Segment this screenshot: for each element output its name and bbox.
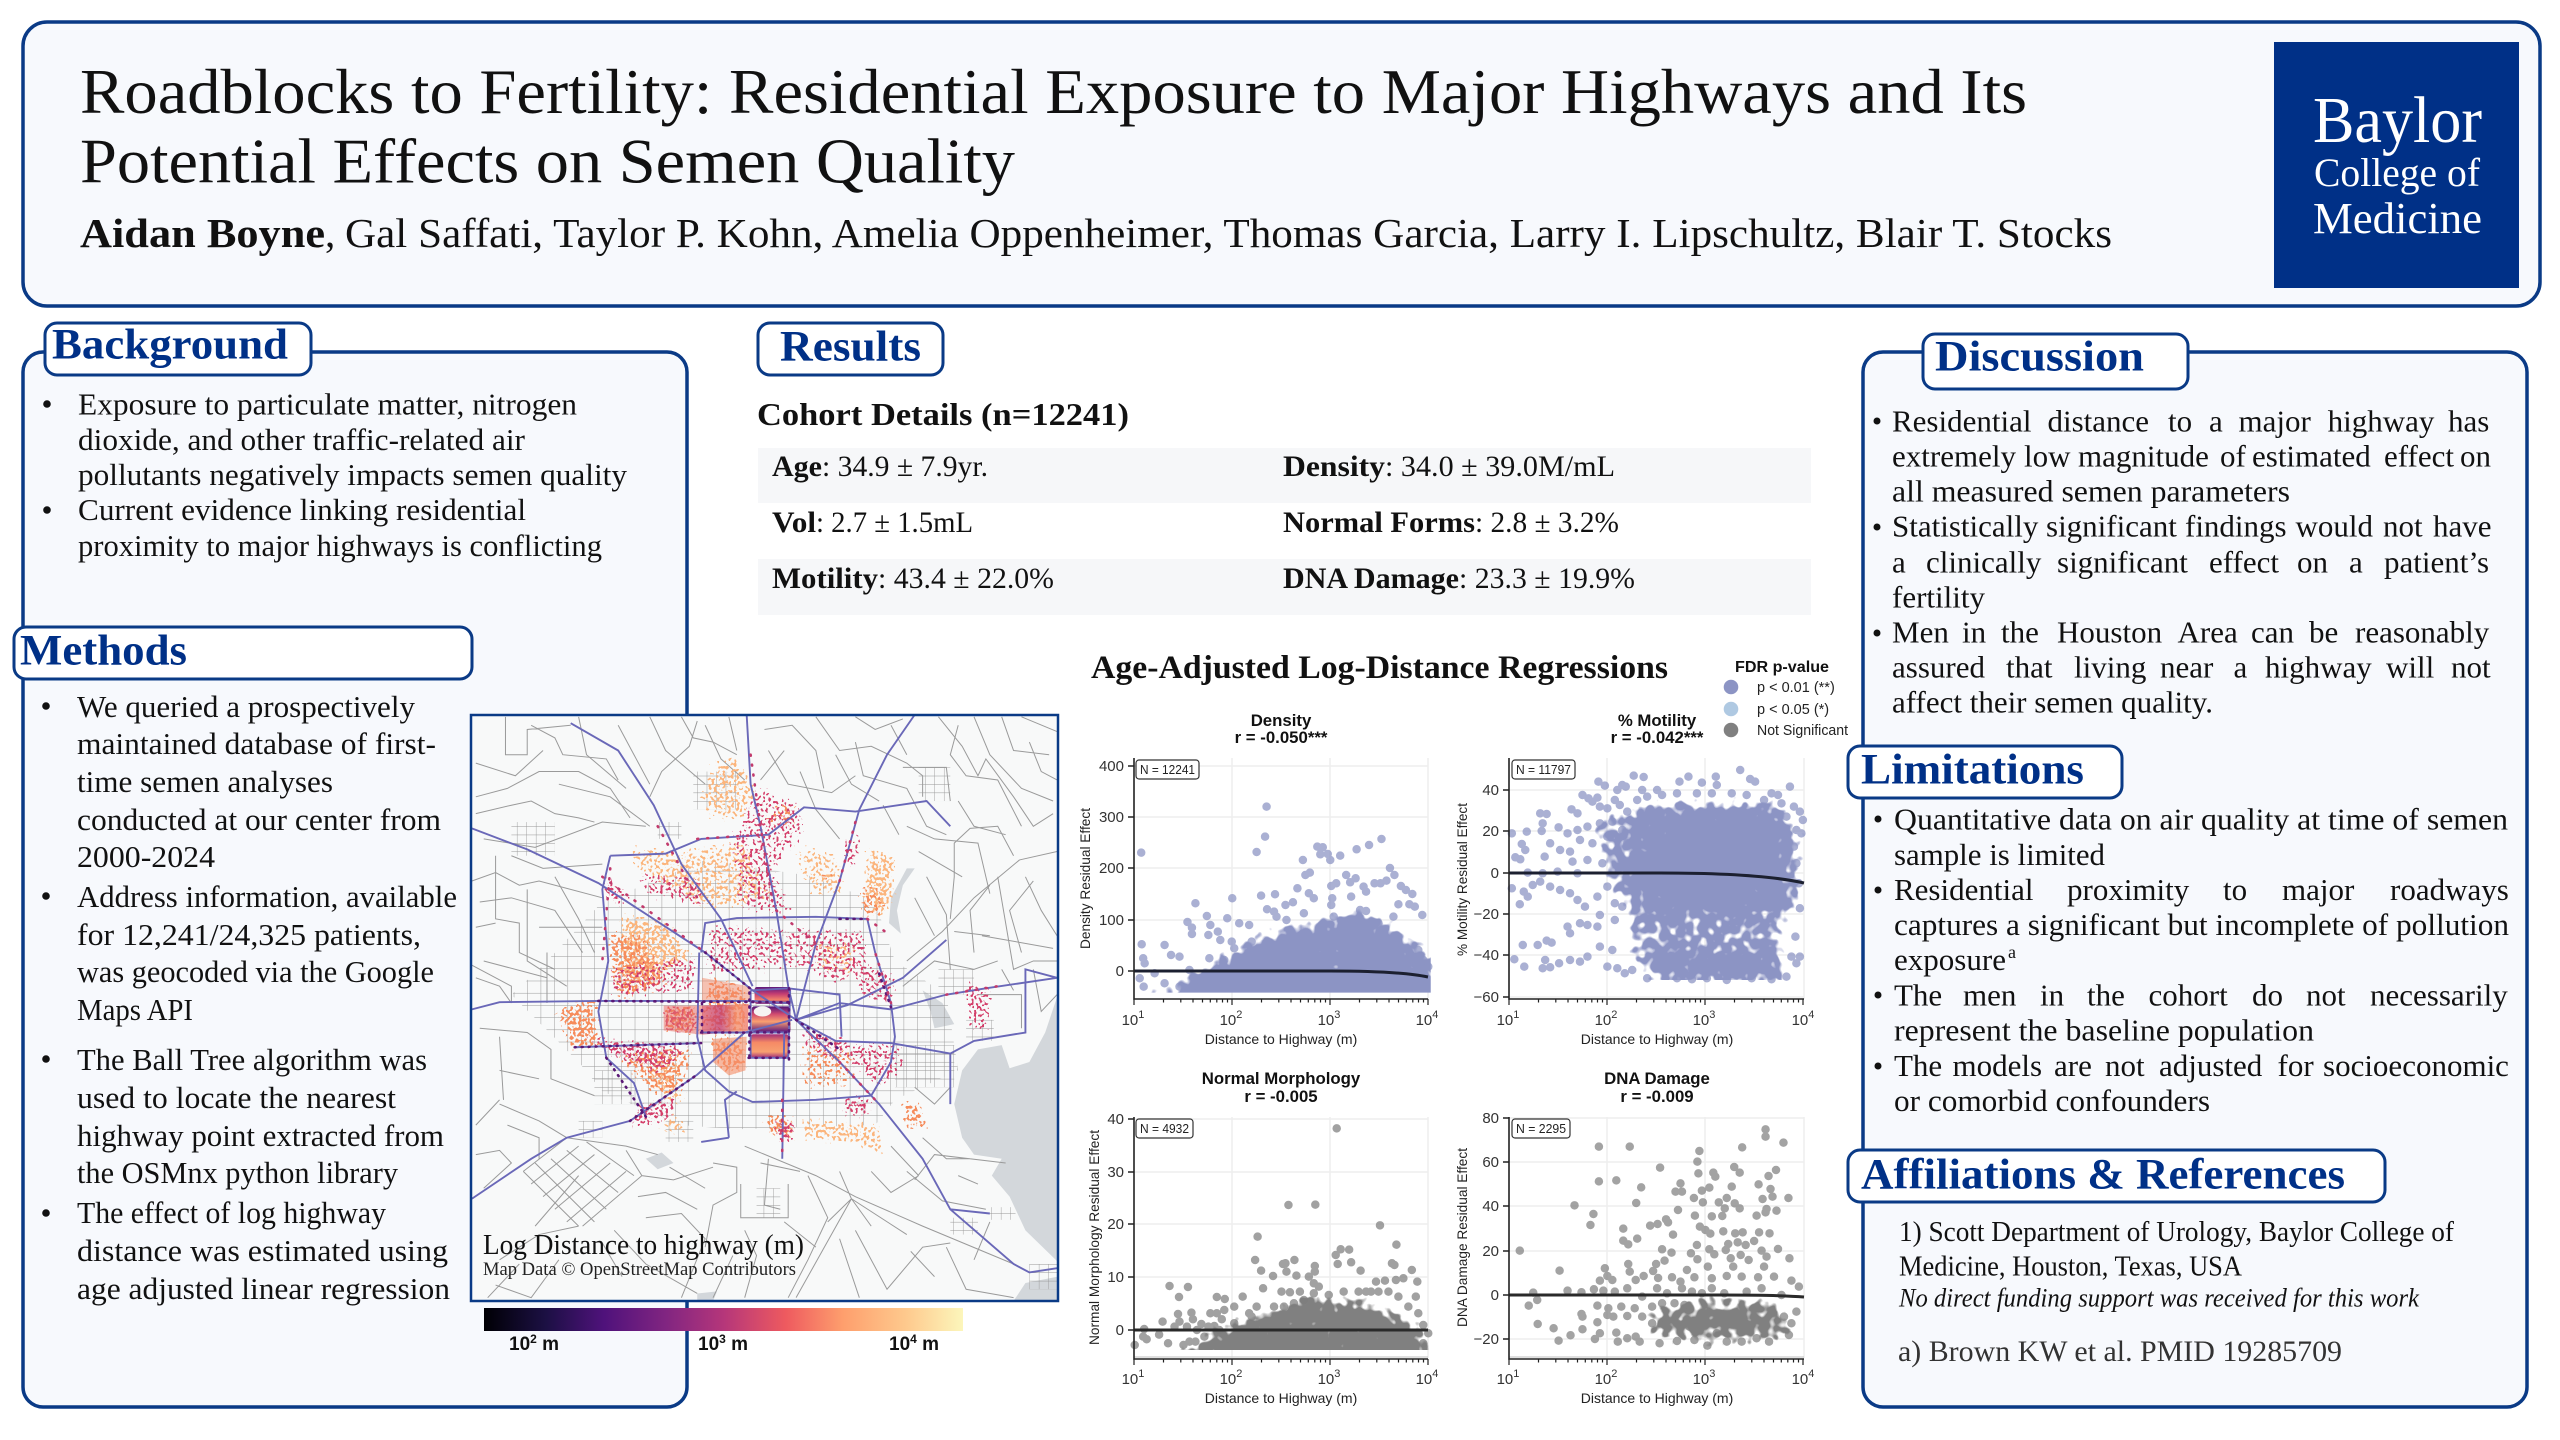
text block: discussion bullets: near bbox=[2160, 650, 2214, 684]
chart: motility scatter bbox=[1454, 711, 1814, 1047]
text block: methods bullets: was geocoded via the Google bbox=[77, 954, 434, 989]
colorbar legend: 10 bbox=[509, 1334, 530, 1355]
text block: limitations bullets: or comorbid confounders bbox=[1894, 1083, 2210, 1118]
text block: discussion bullets: a bbox=[2234, 650, 2248, 684]
table: cohort details: Age bbox=[772, 450, 822, 483]
water: Galveston Bay bbox=[646, 868, 1058, 1301]
map caption bbox=[483, 1230, 804, 1280]
text block: limitations bullets: the bbox=[2087, 978, 2125, 1012]
text block: limitations bullets: adjusted bbox=[2159, 1048, 2263, 1083]
heading: methods: Methods bbox=[20, 628, 187, 674]
chart: DNA damage scatter: DNA Damage bbox=[1604, 1069, 1710, 1088]
chart: motility scatter: 20 bbox=[1482, 823, 1499, 840]
chart: normal morphology scatter: 10 bbox=[1220, 1371, 1236, 1388]
chart: normal morphology scatter: 10 bbox=[1107, 1269, 1124, 1286]
text block: discussion bullets: have bbox=[2433, 508, 2492, 544]
colorbar legend: 10 bbox=[889, 1334, 910, 1355]
panel: right column (discussion, limitations, affiliations) bbox=[1848, 334, 2527, 1407]
text block: methods bullets: Address information, available bbox=[77, 879, 457, 914]
text block: methods bullets: the OSMnx python library bbox=[77, 1155, 398, 1190]
text block: limitations bullets: in bbox=[2040, 978, 2065, 1012]
text block: discussion bullets: that bbox=[2006, 650, 2053, 684]
text block: limitations bullets: to bbox=[2223, 872, 2247, 907]
text block: discussion bullets: effect bbox=[2384, 438, 2454, 474]
dark points along highways bbox=[575, 919, 891, 1121]
chart: density scatter: Density Residual Effect bbox=[1077, 808, 1093, 949]
colorbar legend: m bbox=[537, 1334, 559, 1355]
colorbar legend: 3 bbox=[719, 1332, 726, 1346]
text block: limitations bullets: proximity bbox=[2067, 872, 2190, 907]
text block: limitations bullets: roadways bbox=[2390, 872, 2509, 907]
chart: DNA damage scatter: 40 bbox=[1482, 1198, 1499, 1215]
chart: motility scatter: 3 bbox=[1709, 1009, 1715, 1021]
urban road grid bbox=[511, 860, 958, 1129]
chart: density scatter: Distance to Highway (m) bbox=[1205, 1031, 1357, 1047]
chart: DNA damage scatter: 2 bbox=[1611, 1368, 1617, 1380]
text block: limitations bullets: do bbox=[2252, 978, 2283, 1012]
map caption: Log Distance to highway (m) bbox=[483, 1230, 804, 1261]
text block: discussion bullets: low bbox=[2024, 438, 2071, 474]
chart: normal morphology scatter: 10 bbox=[1318, 1371, 1334, 1388]
chart: motility scatter: 10 bbox=[1792, 1012, 1808, 1029]
chart: density scatter: 4 bbox=[1432, 1009, 1438, 1021]
logo: Baylor College of Medicine: Baylor bbox=[2313, 84, 2482, 157]
text block: limitations bullets: cohort bbox=[2148, 978, 2228, 1012]
chart: motility scatter: 1 bbox=[1513, 1009, 1519, 1021]
text block: discussion bullets: all measured semen parameters bbox=[1892, 474, 2290, 508]
text block: limitations bullets: for bbox=[2278, 1048, 2314, 1083]
chart: motility scatter: −40 bbox=[1474, 947, 1499, 964]
chart: DNA damage scatter bbox=[1454, 1069, 1814, 1406]
text block: discussion bullets: the bbox=[2001, 614, 2039, 650]
chart: DNA damage scatter: 10 bbox=[1693, 1371, 1709, 1388]
text block: discussion bullets: clinically bbox=[1926, 544, 2042, 580]
chart: motility scatter: −60 bbox=[1474, 989, 1499, 1006]
text block: discussion bullets: can bbox=[2251, 614, 2295, 650]
patient address points: orange bbox=[551, 801, 931, 1142]
colorbar legend: m bbox=[726, 1334, 748, 1355]
annotation: N box: N = 12241 bbox=[1140, 762, 1195, 777]
logo: Baylor College of Medicine: Medicine bbox=[2313, 194, 2482, 243]
text block: methods bullets: conducted at our center from bbox=[77, 802, 441, 837]
text block: discussion bullets: Houston bbox=[2057, 614, 2163, 650]
text block: discussion bullets: Area bbox=[2178, 614, 2238, 650]
chart: DNA damage scatter: 1 bbox=[1513, 1368, 1519, 1380]
text block: limitations bullets: The bbox=[1894, 1048, 1942, 1083]
table: cohort details: Vol bbox=[772, 506, 816, 539]
colorbar legend: m bbox=[917, 1334, 939, 1355]
chart: normal morphology scatter: 1 bbox=[1138, 1368, 1144, 1380]
annotation: N box: N = 4932 bbox=[1140, 1121, 1189, 1136]
table: cohort details: : 34.0 ± 39.0M/mL bbox=[1385, 450, 1615, 483]
chart: density scatter: 200 bbox=[1099, 860, 1124, 877]
chart: normal morphology scatter: 3 bbox=[1334, 1368, 1340, 1380]
chart: motility scatter: 2 bbox=[1611, 1009, 1617, 1021]
annotation: N box: N = 11797 bbox=[1516, 762, 1571, 777]
text block: limitations bullets: exposure bbox=[1894, 942, 2006, 977]
text block: affiliations: Medicine, Houston, Texas, USA bbox=[1899, 1250, 2242, 1282]
text block: discussion bullets: reasonably bbox=[2355, 614, 2490, 650]
text block: discussion bullets: to bbox=[2168, 404, 2192, 438]
colorbar legend bbox=[484, 1308, 963, 1355]
chart: density scatter: 400 bbox=[1099, 758, 1124, 775]
chart: motility scatter: 0 bbox=[1491, 865, 1499, 882]
title bbox=[80, 57, 2027, 196]
text block: limitations bullets: sample is limited bbox=[1894, 837, 2105, 872]
text block: background bullets: proximity to major highways is conflicting bbox=[78, 528, 602, 563]
chart: normal morphology scatter: 20 bbox=[1107, 1216, 1124, 1233]
title: Potential Effects on Semen Quality bbox=[80, 126, 1016, 196]
legend: FDR p-value: p < 0.05 (*) bbox=[1757, 702, 1829, 718]
table: cohort details: Normal Forms bbox=[1283, 506, 1475, 539]
central hot zones bbox=[664, 1006, 702, 1035]
authors: Aidan Boyne bbox=[80, 210, 325, 256]
text block: background bullets: Current evidence linking residential bbox=[78, 492, 526, 527]
text block: discussion bullets: not bbox=[2451, 650, 2491, 684]
text block: discussion bullets: fertility bbox=[1892, 580, 1985, 614]
patient address points: pink bbox=[575, 784, 994, 1146]
text block: discussion bullets: magnitude bbox=[2078, 438, 2209, 474]
text block: discussion bullets: will bbox=[2386, 650, 2434, 684]
chart: DNA damage scatter: r = -0.009 bbox=[1620, 1087, 1694, 1106]
legend: FDR p-value: p < 0.01 (**) bbox=[1757, 680, 1835, 696]
highways bbox=[472, 715, 1057, 1272]
text block: limitations bullets: Quantitative data on air quality at time of semen bbox=[1894, 802, 2508, 836]
chart: DNA damage scatter: 80 bbox=[1482, 1110, 1499, 1127]
text block: limitations bullets: The bbox=[1894, 978, 1942, 1012]
heading: regressions: Age-Adjusted Log-Distance Regressions bbox=[1091, 650, 1668, 686]
text block: discussion bullets: distance bbox=[2048, 404, 2149, 438]
chart: motility scatter: Distance to Highway (m) bbox=[1581, 1031, 1733, 1047]
chart: density scatter: 3 bbox=[1334, 1009, 1340, 1021]
chart: normal morphology scatter: 4 bbox=[1432, 1368, 1438, 1380]
table: cohort details: Motility bbox=[772, 562, 878, 595]
chart: normal morphology scatter: Normal Morphology Residual Effect bbox=[1086, 1130, 1102, 1345]
chart: normal morphology scatter: 10 bbox=[1122, 1371, 1138, 1388]
text block: discussion bullets: of bbox=[2220, 438, 2246, 474]
chart: normal morphology scatter bbox=[1086, 1069, 1438, 1406]
text block: limitations bullets: are bbox=[2054, 1048, 2092, 1083]
colorbar legend: 4 bbox=[910, 1332, 917, 1346]
table: cohort details: : 2.8 ± 3.2% bbox=[1475, 506, 1619, 539]
header panel bbox=[23, 22, 2540, 306]
text block: discussion bullets: highway bbox=[2328, 404, 2435, 438]
table: cohort details: : 34.9 ± 7.9yr. bbox=[822, 450, 988, 483]
logo: Baylor College of Medicine: College of bbox=[2314, 150, 2481, 195]
table: cohort details: DNA Damage bbox=[1283, 562, 1459, 595]
chart: motility scatter: 10 bbox=[1693, 1012, 1709, 1029]
heading: cohort details: Cohort Details (n=12241) bbox=[757, 396, 1129, 432]
text block: methods bullets: Maps API bbox=[77, 992, 193, 1027]
heading: limitations: Limitations bbox=[1861, 746, 2084, 794]
heading: affiliations and references: Affiliations & References bbox=[1861, 1152, 2345, 1198]
chart: DNA damage scatter: DNA Damage Residual Effect bbox=[1454, 1148, 1470, 1327]
text block: discussion bullets: affect their semen quality. bbox=[1892, 684, 2213, 720]
text block: discussion bullets: highway bbox=[2265, 650, 2372, 684]
chart: DNA damage scatter: 0 bbox=[1491, 1287, 1499, 1304]
table: cohort details: : 23.3 ± 19.9% bbox=[1459, 562, 1635, 595]
text block: limitations bullets: represent the baseline population bbox=[1894, 1012, 2315, 1048]
chart: DNA damage scatter: 3 bbox=[1709, 1368, 1715, 1380]
text block: limitations bullets: necessarily bbox=[2370, 978, 2508, 1012]
text block: discussion bullets: a bbox=[2349, 544, 2363, 580]
chart: motility scatter: 10 bbox=[1497, 1012, 1513, 1029]
title: Roadblocks to Fertility: Residential Exposure to Major Highways and Its bbox=[80, 57, 2027, 127]
text block: references: a) Brown KW et al. PMID 19285709 bbox=[1898, 1335, 2342, 1368]
chart: density scatter: Density bbox=[1251, 711, 1312, 730]
text block: limitations bullets: major bbox=[2282, 872, 2355, 907]
text block: discussion bullets: be bbox=[2309, 614, 2338, 650]
chart: normal morphology scatter: 0 bbox=[1116, 1322, 1124, 1339]
text block: discussion bullets: on bbox=[2460, 438, 2492, 474]
chart: motility scatter: % Motility bbox=[1618, 711, 1697, 730]
text block: limitations bullets: men bbox=[1963, 978, 2017, 1012]
map: log distance to highway bbox=[471, 715, 1058, 1301]
text block: discussion bullets: patient’s bbox=[2384, 544, 2489, 580]
chart: motility scatter: 40 bbox=[1482, 782, 1499, 799]
logo: Baylor College of Medicine bbox=[2274, 42, 2519, 288]
chart: density scatter: 300 bbox=[1099, 809, 1124, 826]
text block: discussion bullets: in bbox=[1962, 614, 1987, 650]
chart: motility scatter: 10 bbox=[1595, 1012, 1611, 1029]
text block: methods bullets: for 12,241/24,325 patients, bbox=[77, 917, 421, 952]
annotation: N box: N = 2295 bbox=[1516, 1121, 1566, 1136]
text block: discussion bullets: a bbox=[2209, 404, 2223, 438]
authors: , bbox=[325, 210, 335, 256]
authors: Gal Saffati, Taylor P. Kohn, Amelia Oppenheimer, Thomas Garcia, Larry I. Lipschultz, Blair T. Stocks bbox=[345, 210, 2112, 256]
text block: limitations bullets: socioeconomic bbox=[2323, 1048, 2509, 1083]
text block: discussion bullets: extremely bbox=[1892, 438, 2016, 474]
chart: DNA damage scatter: 10 bbox=[1792, 1371, 1808, 1388]
chart: motility scatter: % Motility Residual Effect bbox=[1454, 803, 1470, 956]
table: cohort details: : 43.4 ± 22.0% bbox=[878, 562, 1054, 595]
panel: left column (background and methods) bbox=[14, 322, 687, 1407]
chart: DNA damage scatter: −20 bbox=[1474, 1331, 1499, 1348]
patient address points: light orange bbox=[618, 751, 899, 1163]
legend: FDR p-value bbox=[1724, 659, 1848, 739]
heading: discussion: Discussion bbox=[1935, 334, 2144, 380]
chart: DNA damage scatter: 10 bbox=[1595, 1371, 1611, 1388]
heading: discussion bbox=[1923, 334, 2188, 389]
text block: affiliations: No direct funding support was received for this work bbox=[1898, 1284, 2419, 1312]
text block: methods bullets: used to locate the nearest bbox=[77, 1080, 396, 1115]
text block: discussion bullets: Statistically bbox=[1892, 508, 2039, 544]
chart: motility scatter: r = -0.042*** bbox=[1611, 728, 1704, 747]
chart: normal morphology scatter: 40 bbox=[1107, 1111, 1124, 1128]
legend: FDR p-value: FDR p-value bbox=[1735, 659, 1829, 676]
text block: discussion bullets: not bbox=[2383, 508, 2423, 544]
text block: discussion bullets: Men bbox=[1892, 614, 1949, 650]
text block: methods bullets: The Ball Tree algorithm was bbox=[77, 1042, 427, 1077]
chart: density scatter: r = -0.050*** bbox=[1235, 728, 1328, 747]
table: cohort details bbox=[758, 448, 1811, 615]
text block: limitations bullets: captures a significant but incomplete of pollution bbox=[1894, 907, 2509, 942]
text block: discussion bullets: living bbox=[2074, 650, 2146, 684]
text block: discussion bullets: effect bbox=[2209, 544, 2279, 580]
text block: discussion bullets: would bbox=[2296, 508, 2374, 544]
chart: DNA damage scatter: 60 bbox=[1482, 1154, 1499, 1171]
chart: DNA damage scatter: 20 bbox=[1482, 1243, 1499, 1260]
chart: DNA damage scatter: 4 bbox=[1808, 1368, 1814, 1380]
text block: methods bullets: distance was estimated using bbox=[77, 1233, 448, 1268]
text block: affiliations: 1) Scott Department of Urology, Baylor College of bbox=[1899, 1216, 2454, 1248]
chart: DNA damage scatter: Distance to Highway (m) bbox=[1581, 1390, 1733, 1406]
text block: methods bullets: highway point extracted from bbox=[77, 1118, 444, 1153]
text block: methods bullets: We queried a prospectively bbox=[77, 689, 415, 724]
text block: affiliations bbox=[1898, 1216, 2454, 1312]
text block: background bullets: dioxide, and other traffic-related air bbox=[78, 422, 526, 457]
rural roads bbox=[472, 717, 1057, 1188]
chart: density scatter: 10 bbox=[1220, 1012, 1236, 1029]
chart: normal morphology scatter: Distance to Highway (m) bbox=[1205, 1390, 1357, 1406]
text block: methods bullets: 2000-2024 bbox=[77, 839, 216, 874]
text block: limitations bullets: a bbox=[2008, 942, 2016, 962]
table: cohort details: : 2.7 ± 1.5mL bbox=[816, 506, 973, 539]
heading: background: Background bbox=[52, 322, 288, 368]
text block: methods bullets: time semen analyses bbox=[77, 764, 333, 799]
text block: background bullets: Exposure to particulate matter, nitrogen bbox=[78, 386, 577, 422]
text block: discussion bullets: major bbox=[2238, 404, 2311, 438]
chart: density scatter: 0 bbox=[1116, 963, 1124, 980]
text block: methods bullets bbox=[42, 689, 457, 1306]
chart: normal morphology scatter: 10 bbox=[1416, 1371, 1432, 1388]
text block: background bullets: pollutants negatively impacts semen quality bbox=[78, 457, 627, 492]
chart: density scatter: 2 bbox=[1236, 1009, 1242, 1021]
text block: discussion bullets: findings bbox=[2185, 508, 2287, 544]
colorbar legend: 2 bbox=[530, 1332, 537, 1346]
chart: motility scatter: −20 bbox=[1474, 906, 1499, 923]
chart: motility scatter: 4 bbox=[1808, 1009, 1814, 1021]
text block: discussion bullets: has bbox=[2448, 404, 2489, 438]
text block: discussion bullets: significant bbox=[2046, 508, 2177, 544]
text block: limitations bullets bbox=[1874, 802, 2509, 1118]
chart: density scatter: 10 bbox=[1318, 1012, 1334, 1029]
chart: density scatter: 10 bbox=[1416, 1012, 1432, 1029]
heading: results: Results bbox=[780, 324, 921, 370]
table: cohort details: Density bbox=[1283, 450, 1385, 483]
text block: discussion bullets: significant bbox=[2057, 544, 2188, 580]
chart: density scatter: 1 bbox=[1138, 1009, 1144, 1021]
chart: normal morphology scatter: r = -0.005 bbox=[1244, 1087, 1318, 1106]
heading: methods bbox=[14, 627, 472, 679]
chart: normal morphology scatter: 2 bbox=[1236, 1368, 1242, 1380]
text block: discussion bullets bbox=[1874, 404, 2492, 720]
chart: density scatter: 10 bbox=[1122, 1012, 1138, 1029]
text block: limitations bullets: not bbox=[2306, 978, 2346, 1012]
text block: discussion bullets: assured bbox=[1892, 650, 1985, 684]
heading: results bbox=[758, 323, 943, 375]
text block: methods bullets: maintained database of first- bbox=[77, 726, 436, 761]
text block: limitations bullets: models bbox=[1952, 1048, 2042, 1083]
chart: density scatter bbox=[1077, 711, 1438, 1047]
text block: discussion bullets: a bbox=[1892, 544, 1906, 580]
chart: density scatter: 100 bbox=[1099, 912, 1124, 929]
chart: DNA damage scatter: 10 bbox=[1497, 1371, 1513, 1388]
text block: limitations bullets: not bbox=[2105, 1048, 2145, 1083]
text block: discussion bullets: Residential bbox=[1892, 404, 2031, 438]
text block: background bullets bbox=[43, 386, 627, 563]
legend: FDR p-value: Not Significant bbox=[1757, 723, 1848, 739]
text block: methods bullets: age adjusted linear regression bbox=[77, 1271, 450, 1306]
chart: normal morphology scatter: 30 bbox=[1107, 1164, 1124, 1181]
map caption: Map Data © OpenStreetMap Contributors bbox=[483, 1260, 796, 1280]
chart: normal morphology scatter: Normal Morphology bbox=[1202, 1069, 1361, 1088]
text block: limitations bullets: Residential bbox=[1894, 872, 2033, 907]
colorbar legend: 10 bbox=[698, 1334, 719, 1355]
text block: methods bullets: The effect of log highway bbox=[77, 1195, 386, 1230]
text block: discussion bullets: on bbox=[2297, 544, 2328, 580]
text block: discussion bullets: estimated bbox=[2252, 438, 2371, 474]
